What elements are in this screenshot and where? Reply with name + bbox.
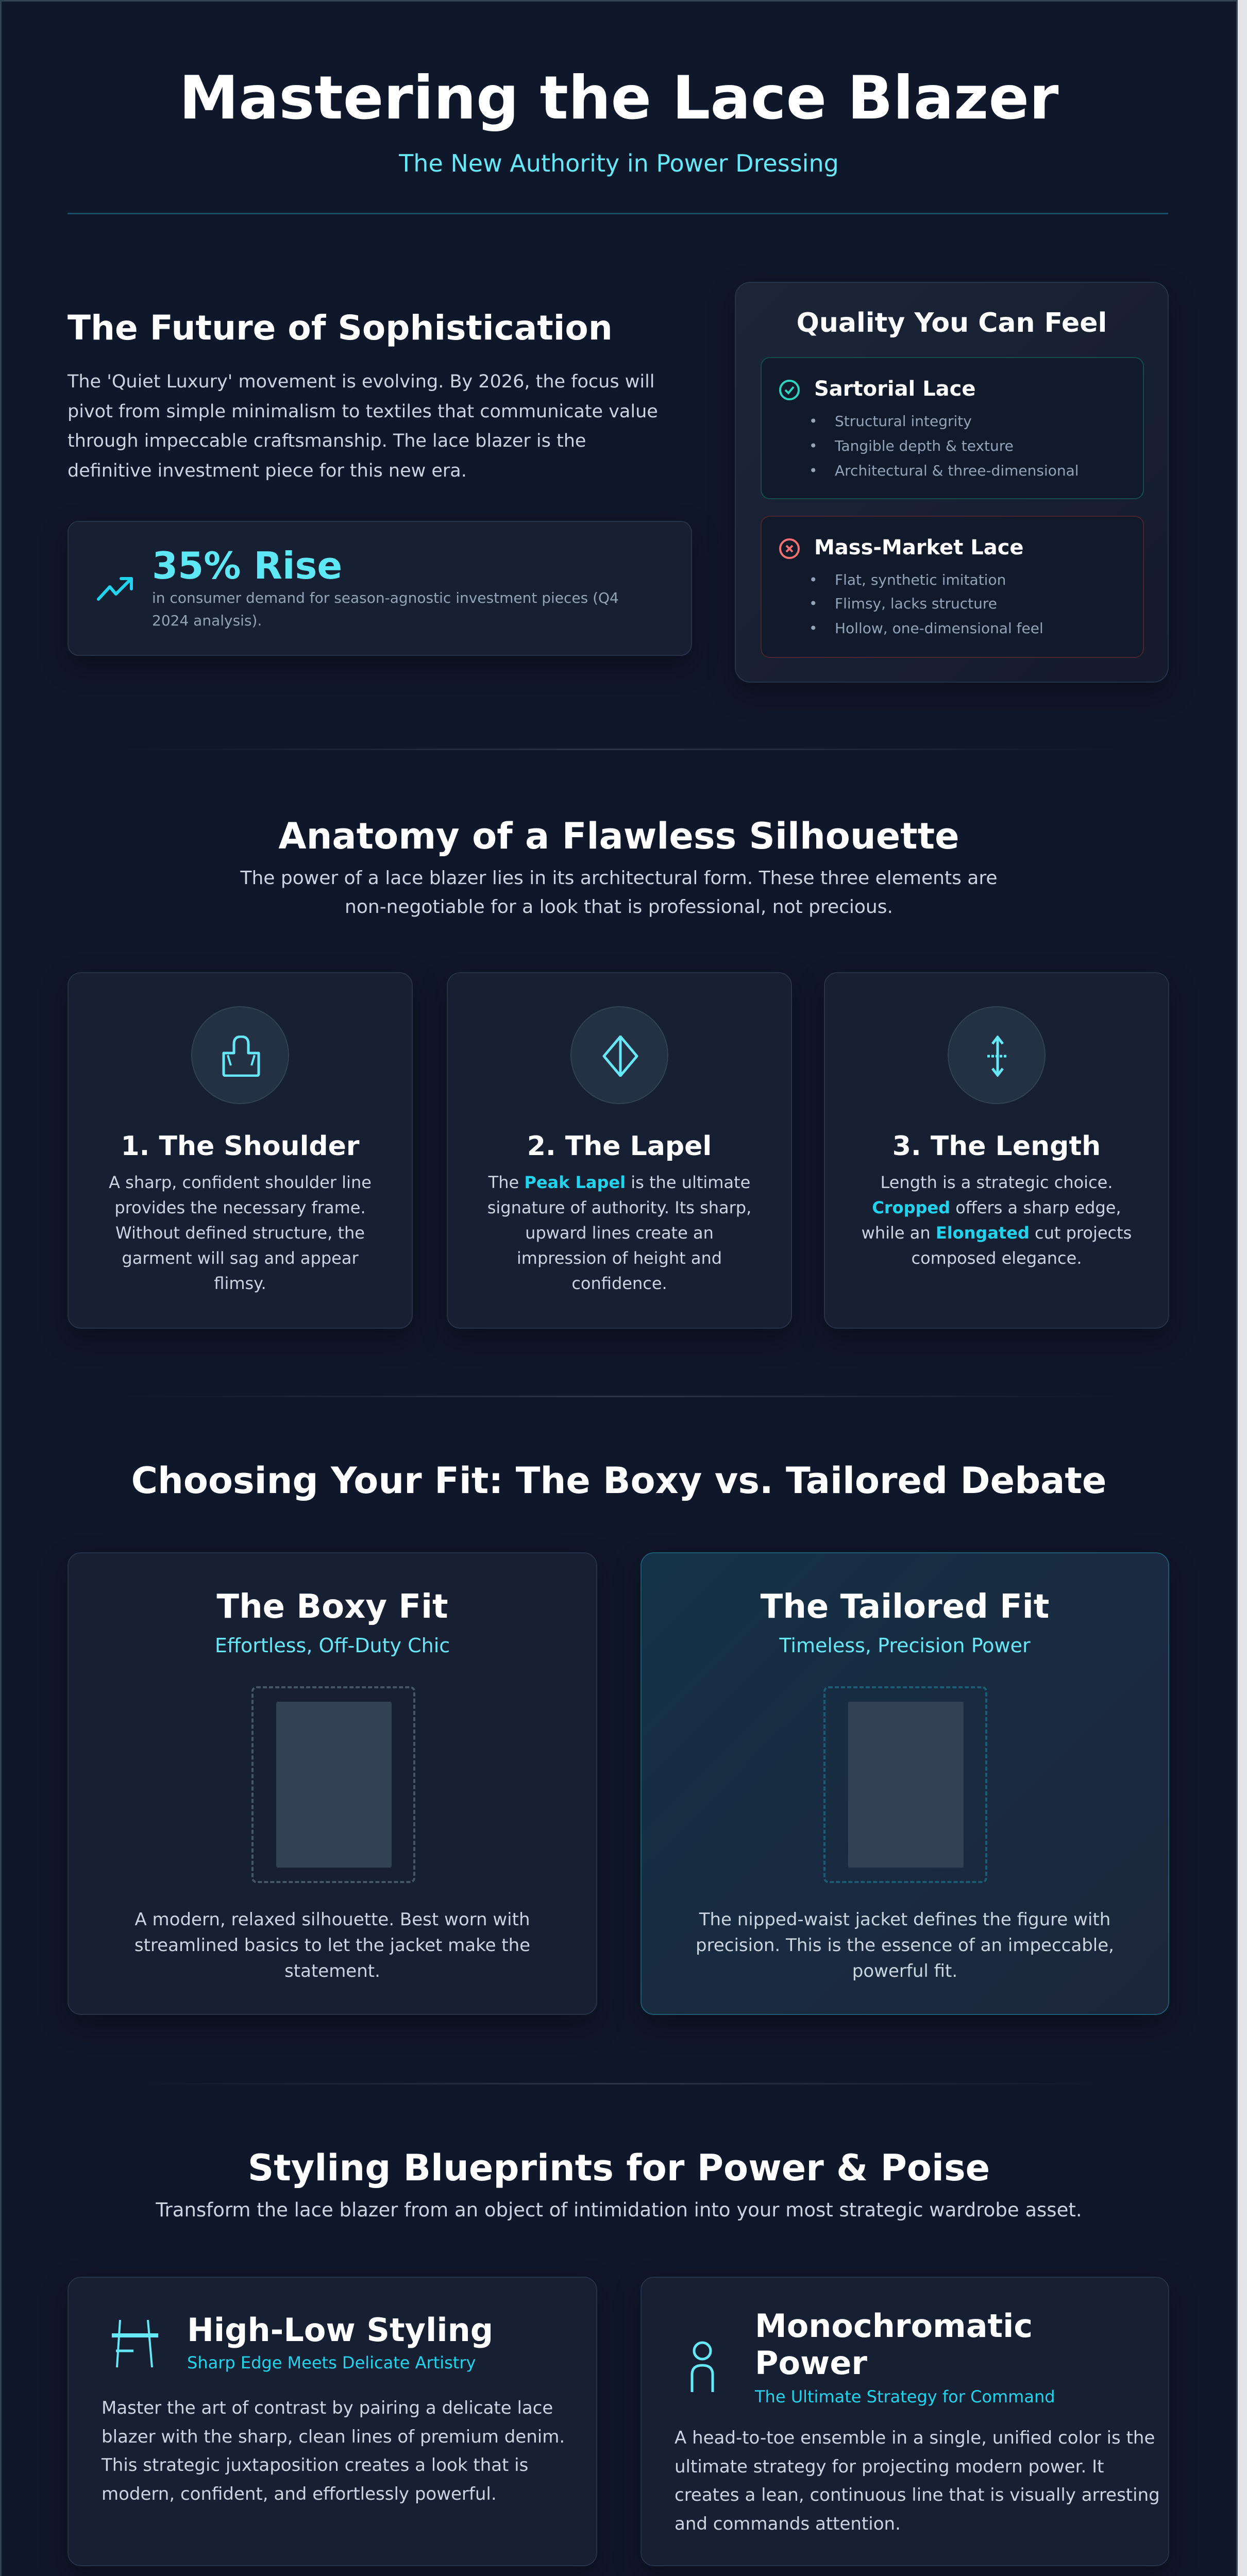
card: high-low styling: High-Low Styling <box>187 2311 493 2349</box>
icon: shoulder <box>191 1006 289 1104</box>
intro paragraph <box>67 371 658 481</box>
card: monochromatic power <box>641 2277 1169 2566</box>
card: lapel: 2. The Lapel <box>527 1131 712 1162</box>
card: boxy fit: Effortless, Off-Duty Chic <box>215 1634 450 1657</box>
box: mass-market lace: Mass-Market Lace <box>814 536 1024 560</box>
box: mass-market lace: Flimsy, lacks structure <box>835 595 997 612</box>
card: tailored fit: The Tailored Fit <box>761 1588 1049 1626</box>
box: sartorial lace: Structural integrity <box>835 413 972 430</box>
card: lapel <box>447 972 792 1329</box>
intro paragraph: pivot from simple minimalism to textiles that communicate value <box>68 401 658 421</box>
card: tailored fit: The nipped-waist jacket defines the figure with precision. This is the essence of an impeccable, powerful fit. <box>696 1909 1114 1981</box>
box: mass-market lace: Hollow, one-dimensional feel <box>835 620 1043 637</box>
card: high-low styling: Master the art of contrast by pairing a delicate lace blazer with the sharp, clean lines of premium denim. This strategic juxtaposition creates a look that is modern, confident, and effortlessly powerful. <box>102 2398 565 2504</box>
card: boxy fit: The Boxy Fit <box>216 1588 448 1626</box>
card: shoulder: 1. The Shoulder <box>121 1131 360 1162</box>
icon: person <box>690 2341 714 2392</box>
box: mass-market lace <box>761 516 1144 658</box>
card: high-low styling <box>68 2277 597 2566</box>
card: monochromatic power: A head-to-toe ensemble in a single, unified color is the ultimate strategy for projecting modern power. It creates a lean, continuous line that is visually arresting and commands attention. <box>675 2428 1160 2534</box>
card: boxy fit <box>68 1552 597 2015</box>
subtitle: The New Authority in Power Dressing <box>399 149 839 177</box>
box: sartorial lace: Tangible depth & texture <box>835 437 1014 454</box>
heading: future of sophistication: The Future of Sophistication <box>68 308 613 348</box>
panel: quality you can feel <box>735 282 1169 683</box>
icon: trending up <box>97 577 133 601</box>
card: high-low styling: Sharp Edge Meets Delicate Artistry <box>187 2353 476 2372</box>
styling intro: Transform the lace blazer from an object of intimidation into your most strategic wardrobe asset. <box>156 2199 1082 2221</box>
icon: length <box>948 1006 1046 1104</box>
title: Mastering the Lace Blazer <box>179 63 1058 133</box>
anatomy intro: The power of a lace blazer lies in its architectural form. These three elements are non-negotiable for a look that is professional, not precious. <box>240 868 998 918</box>
icon: high-low <box>112 2319 158 2368</box>
card: tailored fit: Timeless, Precision Power <box>779 1634 1031 1657</box>
icon: lapel <box>570 1006 668 1104</box>
box: sartorial lace <box>761 357 1144 499</box>
heading: anatomy: Anatomy of a Flawless Silhouette <box>278 815 959 857</box>
card: lapel: The Peak Lapel is the ultimate signature of authority. Its sharp, upward lines create an impression of height and confidence. <box>487 1173 751 1293</box>
box: sartorial lace: Sartorial Lace <box>814 377 976 401</box>
bullets <box>811 571 1043 637</box>
stat caption: in consumer demand for season-agnostic investment pieces (Q4 2024 analysis). <box>152 589 619 629</box>
card: monochromatic power: Monochromatic Power <box>755 2307 1033 2382</box>
card: shoulder: A sharp, confident shoulder line provides the necessary frame. Without defined structure, the garment will sag and appear flimsy. <box>109 1173 372 1293</box>
heading: choosing your fit: Choosing Your Fit: The Boxy vs. Tailored Debate <box>131 1460 1106 1502</box>
bullets <box>811 413 1079 479</box>
box: sartorial lace: Architectural & three-dimensional <box>835 462 1079 479</box>
card: length: Length is a strategic choice. Cropped offers a sharp edge, while an Elongated cut projects composed elegance. <box>862 1173 1132 1268</box>
stat number: 35% Rise <box>152 544 342 587</box>
intro paragraph: The 'Quiet Luxury' movement is evolving. By 2026, the focus will <box>68 371 655 392</box>
card: tailored fit <box>641 1552 1169 2015</box>
intro paragraph: through impeccable craftsmanship. The lace blazer is the <box>68 431 586 451</box>
card: length: 3. The Length <box>892 1131 1101 1162</box>
card: monochromatic power: The Ultimate Strategy for Command <box>755 2387 1055 2406</box>
card: boxy fit: A modern, relaxed silhouette. Best worn with streamlined basics to let the jacket make the statement. <box>134 1909 530 1981</box>
card: length <box>824 972 1169 1329</box>
stat callout <box>68 521 692 656</box>
silhouette: boxy <box>251 1686 415 1883</box>
card: shoulder <box>68 972 413 1329</box>
box: mass-market lace: Flat, synthetic imitation <box>835 571 1006 588</box>
icon: x <box>779 538 800 559</box>
heading: styling blueprints: Styling Blueprints for Power & Poise <box>248 2147 990 2189</box>
silhouette: tailored <box>823 1686 987 1883</box>
intro paragraph: definitive investment piece for this new era. <box>68 461 467 481</box>
panel heading: Quality You Can Feel <box>797 308 1107 338</box>
icon: check <box>779 380 800 400</box>
